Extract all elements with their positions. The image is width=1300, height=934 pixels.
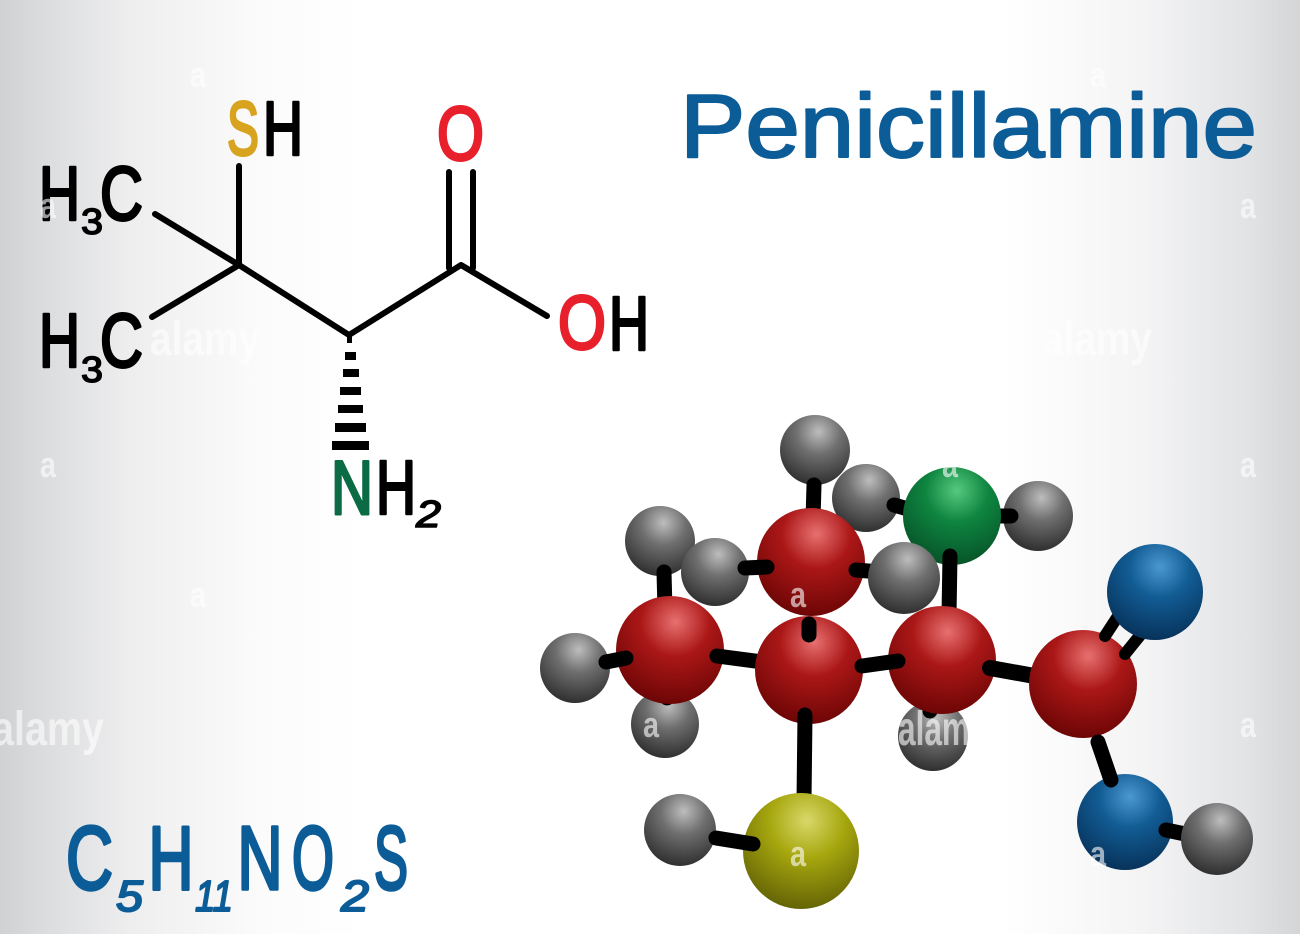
atom: hydrogen upper left — [625, 506, 695, 576]
label: NH2 — [331, 446, 441, 536]
skeletal bonds — [152, 166, 547, 335]
watermarks: a — [643, 704, 660, 745]
carboxyl double bond — [1105, 610, 1146, 654]
back hydrogens below ring — [631, 690, 968, 771]
atom: carbon left — [616, 596, 724, 704]
label: NH2: N — [331, 446, 373, 531]
atom: hydrogen front left — [681, 538, 749, 606]
label: OH — [558, 281, 649, 367]
atom: blue sphere lower — [1077, 774, 1173, 870]
label: SH — [227, 87, 303, 172]
label: SH: H — [263, 87, 303, 172]
label: NH2: H — [376, 446, 416, 531]
sulfur bond stub — [716, 838, 753, 844]
watermarks: a — [190, 54, 207, 95]
watermarks: alam — [898, 703, 970, 756]
label: O: O — [437, 92, 484, 177]
chemical formula: N — [238, 809, 282, 909]
hashed stereo bond to amine — [332, 336, 369, 450]
atom: hydrogen on sulfur — [644, 794, 716, 866]
label: lower H3C: 3 — [81, 349, 103, 390]
atom: green sphere — [903, 467, 1001, 565]
ball and stick model — [540, 415, 1253, 909]
chemical formula — [66, 809, 408, 921]
watermarks: alamy — [150, 313, 260, 366]
watermarks: a — [790, 574, 807, 615]
atom: carbon centre — [755, 616, 863, 724]
bond stub on carbon left — [606, 658, 626, 662]
atom: hydrogen front right — [868, 542, 940, 614]
chemical formula: 2 — [340, 872, 369, 921]
atom: carbon top — [757, 508, 865, 616]
watermarks: a — [1240, 444, 1257, 485]
watermarks: alamy — [1042, 313, 1152, 366]
atom: sulfur — [743, 793, 859, 909]
chemical formula: O — [292, 809, 334, 909]
label: SH: S — [227, 87, 259, 172]
label: upper H3C: C — [100, 152, 143, 237]
watermarks: a — [942, 444, 959, 485]
centre carbon stubs — [804, 624, 898, 800]
chemical formula: 5 — [116, 872, 144, 921]
label: lower H3C: C — [100, 299, 143, 384]
label: upper H3C: H — [39, 152, 80, 237]
atom: hydrogen on blue — [1181, 803, 1253, 875]
watermarks: a — [190, 574, 207, 615]
atom: blue sphere upper — [1107, 544, 1203, 640]
title: Penicillamine — [680, 77, 1257, 177]
back bond stubs — [664, 485, 1011, 610]
lower blue bonds — [1098, 742, 1190, 835]
atom: hydrogen on green right — [1003, 481, 1073, 551]
watermarks: a — [1090, 833, 1107, 874]
atom: carbon right — [888, 606, 996, 714]
atom: carbon carboxyl — [1029, 630, 1137, 738]
label: NH2: 2 — [415, 494, 441, 536]
label: OH: H — [609, 282, 649, 367]
chemical formula: 11 — [195, 872, 233, 921]
structural formula — [39, 87, 649, 536]
label: upper H3C: 3 — [81, 201, 103, 242]
mid bond stubs — [717, 556, 950, 663]
watermarks: a — [40, 185, 57, 226]
watermarks: a — [1240, 704, 1257, 745]
watermarks: a — [1240, 185, 1257, 226]
right carbon stubs — [990, 668, 1040, 677]
chemical formula: S — [374, 809, 408, 909]
label: upper H3C — [39, 152, 143, 242]
chemical formula: C — [66, 809, 113, 909]
watermarks: a — [40, 444, 57, 485]
label: lower H3C — [39, 299, 143, 390]
watermarks: a — [790, 833, 807, 874]
atom: hydrogen far left — [540, 633, 610, 703]
label: OH: O — [558, 281, 606, 366]
label: lower H3C: H — [39, 299, 80, 384]
chemical formula: H — [148, 809, 194, 909]
atom: hydrogen on green left — [832, 464, 900, 532]
watermarks: a — [1090, 54, 1107, 95]
atom: hydrogen top — [780, 415, 850, 485]
